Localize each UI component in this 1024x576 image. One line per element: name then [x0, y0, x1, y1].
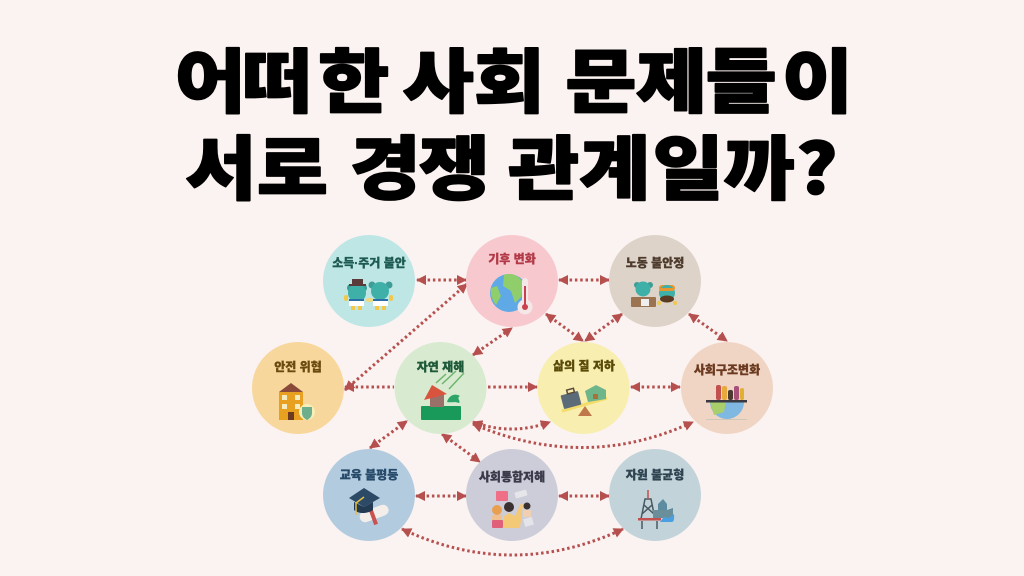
icon: building and shield	[279, 383, 315, 420]
icon: people standing on earth	[706, 385, 747, 420]
icon: graduation cap and diploma	[349, 488, 390, 525]
panel: safety threats: 안전 위협	[274, 359, 322, 374]
icon: bears at desk	[631, 282, 677, 307]
panel: income and housing insecurity: 소득·주거 불안	[332, 256, 406, 270]
icon: storm-hit house	[421, 371, 464, 420]
panel: lower quality of life	[538, 342, 630, 434]
panel: social cohesion harm	[466, 449, 558, 541]
icon: seesaw with briefcase and house	[560, 385, 607, 416]
panel: education inequality: 교육 불평등	[340, 467, 398, 482]
panel: natural disasters	[394, 342, 486, 434]
panel: climate change: 기후 변화	[488, 251, 536, 266]
panel: resource imbalance: 자원 불균형	[626, 467, 684, 482]
panel: lower quality of life: 삶의 질 저하	[553, 358, 615, 373]
title	[175, 27, 853, 214]
panel: natural disasters: 자연 재해	[417, 359, 464, 374]
panel: social structure change	[681, 342, 773, 434]
arrows: connections between issues	[345, 280, 727, 555]
panel: education inequality	[323, 449, 415, 541]
icon: earth and thermometer	[490, 274, 532, 314]
title: 서로 경쟁 관계일까?	[186, 114, 838, 214]
icon: two bears	[344, 279, 393, 310]
panel: social structure change: 사회구조변화	[694, 362, 760, 377]
icon: oil rig	[638, 490, 674, 529]
panel: job insecurity: 노동 불안정	[626, 255, 684, 270]
panel: income and housing insecurity	[323, 235, 415, 327]
title: 어떠한 사회 문제들이	[175, 27, 853, 127]
panel: safety threats	[252, 342, 344, 434]
panel: resource imbalance	[609, 449, 701, 541]
icon: arguing people	[492, 490, 534, 528]
panel: climate change	[466, 235, 558, 327]
panel: job insecurity	[609, 235, 701, 327]
panel: social cohesion harm: 사회통합저해	[479, 469, 545, 484]
